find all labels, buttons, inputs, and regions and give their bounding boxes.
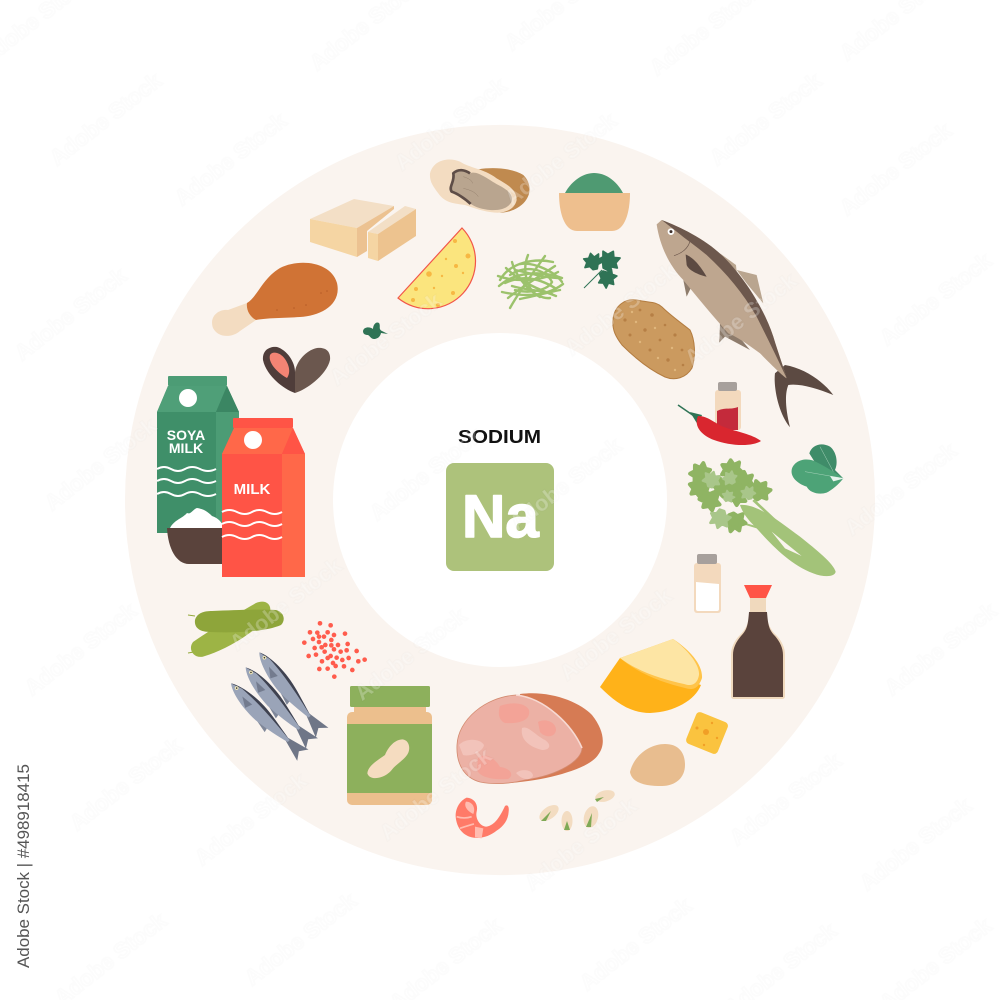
watermark: repeated stock marks: Adobe Stock (225, 552, 347, 655)
icon: cheese wedge (600, 639, 702, 713)
icon: celery (686, 459, 836, 576)
icon: sardines (223, 647, 328, 763)
icon: oyster (430, 159, 530, 213)
element tile: Na (446, 463, 554, 571)
watermark: repeated stock marks: Adobe Stock (45, 67, 167, 170)
heading: sodium: SODIUM (458, 427, 541, 447)
icon: pistachios (537, 788, 616, 831)
icon: red chili (678, 405, 761, 445)
icon: soya milk carton: MILK (169, 440, 203, 456)
icon: soya milk carton (157, 376, 239, 533)
icon: pickled cucumbers (188, 602, 284, 657)
icon: cilantro (584, 246, 624, 291)
icon: milk carton: MILK (234, 481, 270, 498)
watermark: repeated stock marks: Adobe Stock (880, 597, 1000, 700)
watermark: repeated stock marks: Adobe Stock (375, 742, 497, 845)
watermark: repeated stock marks: Adobe Stock (500, 107, 622, 210)
icon: seaweed tangle (498, 255, 563, 308)
icon: small parsley (363, 322, 388, 339)
watermark: repeated stock marks: Adobe Stock (65, 732, 187, 835)
watermark: repeated stock marks: Adobe Stock (505, 432, 627, 535)
icon: ham (457, 693, 603, 784)
watermark: repeated stock marks: Adobe Stock (325, 287, 447, 390)
icon: spinach leaves (792, 444, 844, 494)
watermark: repeated stock marks: Adobe Stock (350, 602, 472, 705)
icon: bread slice (613, 300, 694, 379)
watermark: repeated stock marks: Adobe Stock (390, 72, 512, 175)
icon: egg (630, 744, 685, 786)
icon: shrimp (456, 798, 509, 838)
panel: beige ring (125, 125, 875, 875)
watermark: repeated stock marks: Adobe Stock (575, 892, 697, 995)
icon: soy sauce bottle (731, 585, 785, 699)
icon: cheese slice (398, 228, 476, 309)
icon: tofu blocks (310, 199, 416, 261)
watermark: repeated stock marks: Adobe Stock (40, 412, 162, 515)
watermark: repeated stock marks: Adobe Stock (20, 597, 142, 700)
icon: salt shaker (694, 554, 721, 613)
icon: tuna fish (657, 220, 833, 427)
icon: chicken drumstick (212, 263, 338, 336)
watermark: repeated stock marks: Adobe Stock (10, 262, 132, 365)
watermark: repeated stock marks: Adobe Stock (170, 107, 292, 210)
icon: milk carton (222, 418, 305, 577)
watermark: repeated stock marks: Adobe Stock (835, 117, 957, 220)
icon: red caviar dots (302, 621, 367, 679)
watermark: repeated stock marks: Adobe Stock (725, 747, 847, 850)
element tile: Na: Na (462, 483, 539, 550)
icon: rice bowl (167, 508, 224, 564)
icon: green powder bowl (559, 173, 630, 231)
icon: soya milk carton: SOYA (167, 427, 205, 443)
icon: chili spice jar (715, 382, 741, 430)
watermark text: stock id: Adobe Stock | #498918415 (14, 764, 33, 968)
icon: mussel (263, 347, 330, 393)
watermark: repeated stock marks: Adobe Stock (365, 422, 487, 525)
watermark: repeated stock marks: Adobe Stock (190, 767, 312, 870)
watermark: repeated stock marks: Adobe Stock (240, 887, 362, 990)
watermark: repeated stock marks: Adobe Stock (875, 247, 997, 350)
watermark: repeated stock marks: Adobe Stock (680, 267, 802, 370)
watermark: repeated stock marks: Adobe Stock (520, 792, 642, 895)
watermark: repeated stock marks: Adobe Stock (855, 792, 977, 895)
watermark: repeated stock marks: Adobe Stock (560, 257, 682, 360)
icon: cheese cube (685, 711, 729, 755)
watermark: repeated stock marks: Adobe Stock (555, 582, 677, 685)
watermark: repeated stock marks: Adobe Stock (840, 437, 962, 540)
icon: peanut butter jar (347, 686, 432, 805)
watermark: repeated stock marks: Adobe Stock (705, 67, 827, 170)
